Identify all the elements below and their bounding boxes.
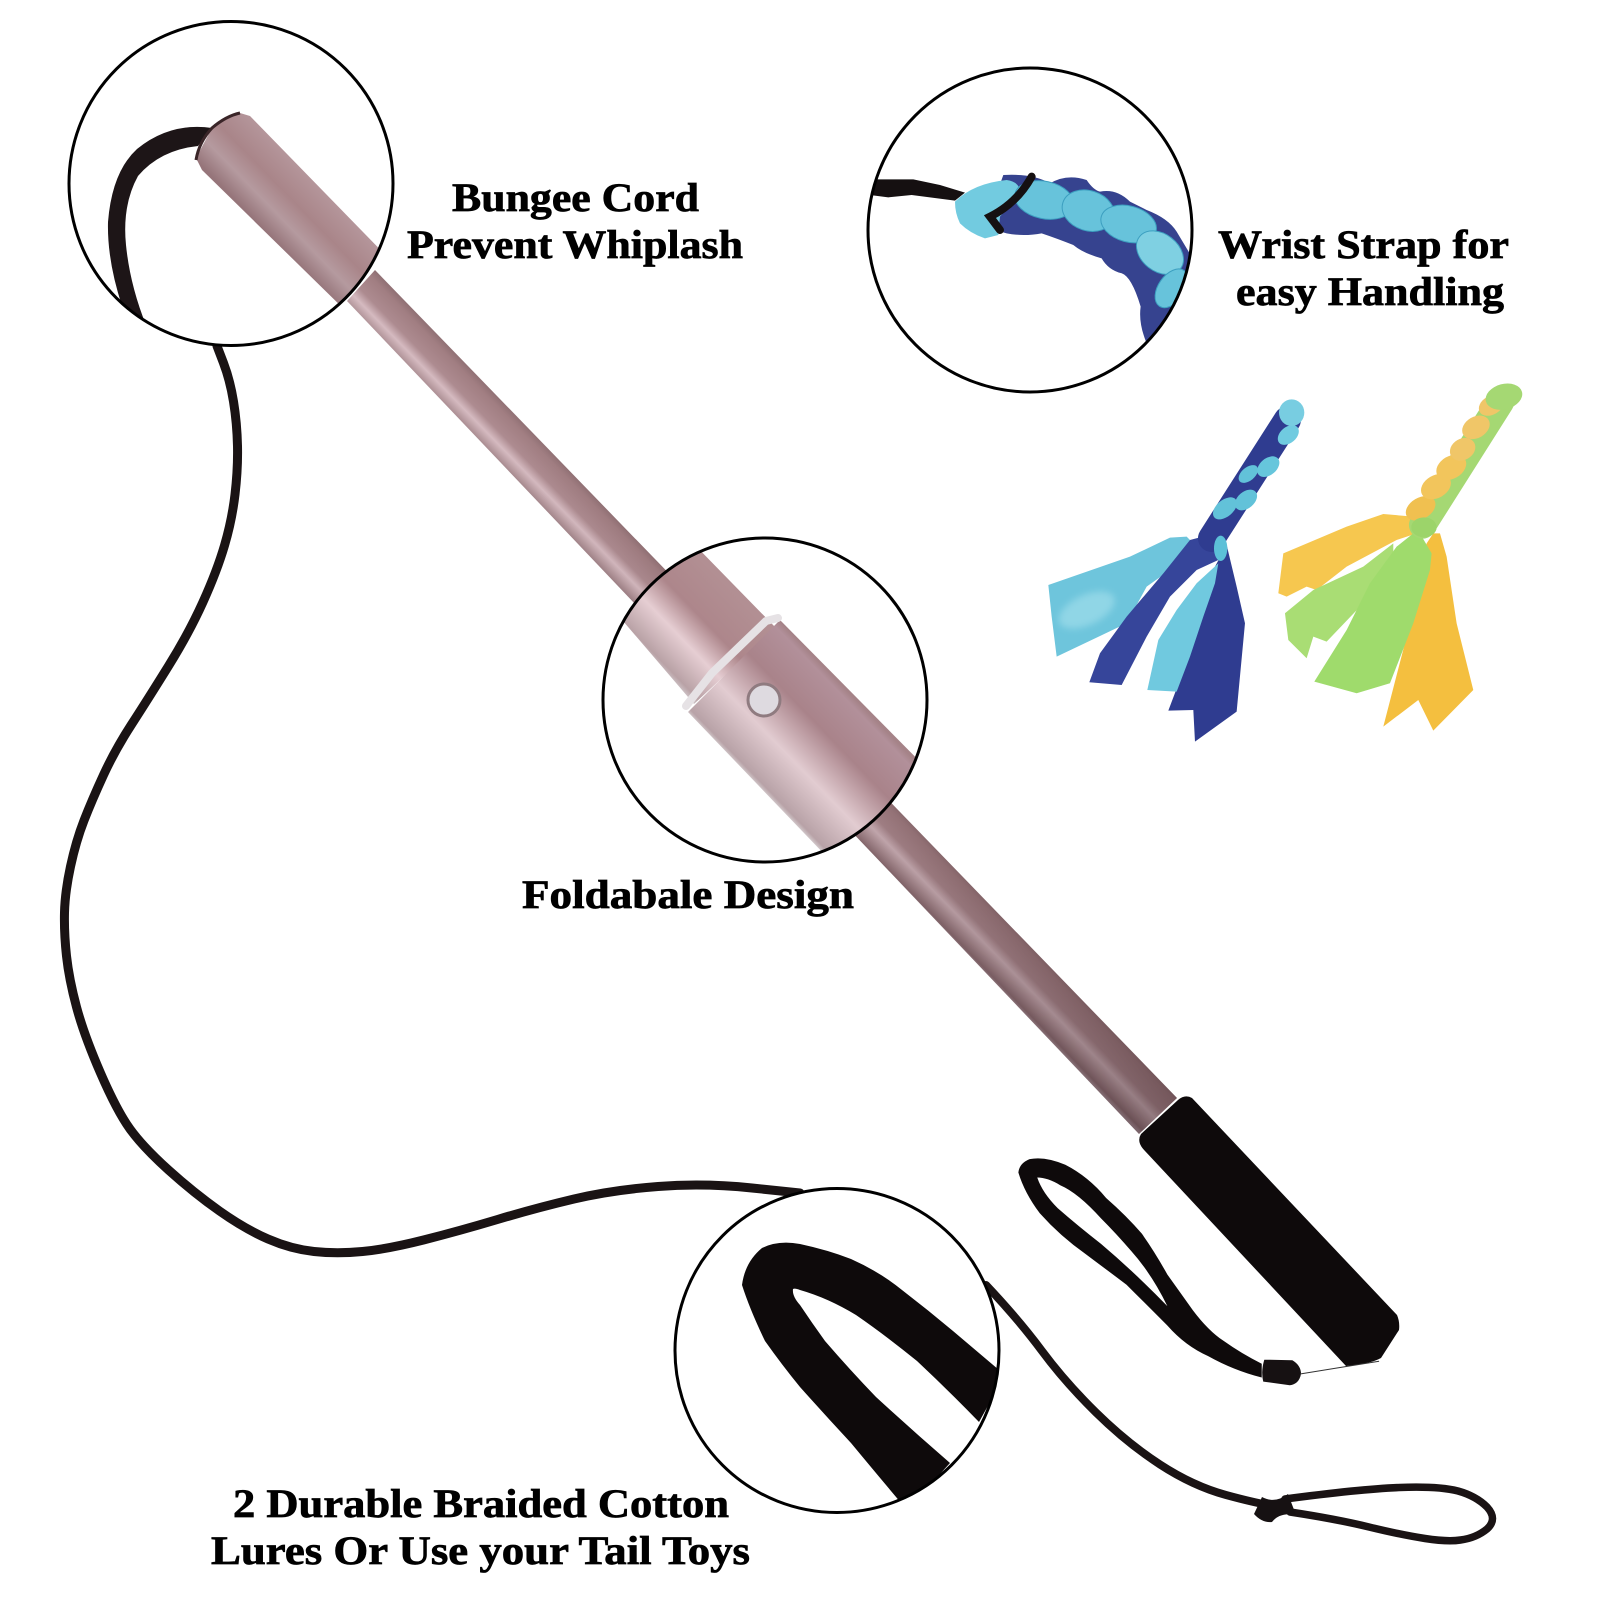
strip light blue middle: [1147, 563, 1218, 692]
magnified upper section: [624, 552, 774, 704]
dark blue strands: [988, 175, 1192, 343]
label: easy handling: easy Handling: [1236, 269, 1504, 314]
rod shaft: [347, 270, 1177, 1134]
button: [748, 684, 780, 716]
magnified rod end: [197, 113, 378, 304]
callout circle: braided lure close-up: [868, 68, 1195, 392]
small tail lure toy green yellow: [1278, 380, 1525, 731]
callout circle: wrist strap loop close-up: [675, 1188, 1005, 1512]
magnified cord: [108, 127, 212, 325]
white ring: [686, 618, 778, 706]
label: wrist strap: Wrist Strap for: [1218, 222, 1509, 267]
strip yellow right: [1383, 533, 1473, 731]
light blue strands: [955, 175, 1195, 314]
label: lures or toys: Lures Or Use your Tail Toys: [211, 1528, 750, 1573]
strip light blue left: [1048, 537, 1193, 657]
knot on cord loop: [1254, 1494, 1296, 1522]
magnified lower section: [688, 620, 915, 850]
strap slider: [1262, 1360, 1301, 1385]
strip green main: [1314, 533, 1432, 693]
label: braided cotton: 2 Durable Braided Cotton: [233, 1481, 729, 1526]
callout circle: foldable joint: [603, 538, 945, 881]
braid green: [1401, 380, 1525, 537]
braid blue: [1209, 399, 1304, 561]
black cord end: [870, 179, 965, 201]
label: bungee cord: Bungee Cord: [452, 175, 699, 220]
label: foldable design: Foldabale Design: [522, 872, 854, 917]
callout circle: bungee cord: [69, 22, 400, 346]
strip dark blue: [1089, 533, 1218, 685]
bungee cord: [64, 346, 1493, 1541]
wrist strap: [1018, 1158, 1379, 1385]
thin string: [1300, 1361, 1379, 1374]
foam handle grip: [1139, 1096, 1399, 1366]
black elastic band: [990, 177, 1032, 230]
strip dark blue right: [1168, 545, 1245, 742]
label: prevent whiplash: Prevent Whiplash: [407, 222, 743, 267]
strip green left: [1285, 543, 1393, 658]
strip yellow left: [1278, 514, 1417, 597]
small tail lure toy blue: [1048, 399, 1304, 742]
